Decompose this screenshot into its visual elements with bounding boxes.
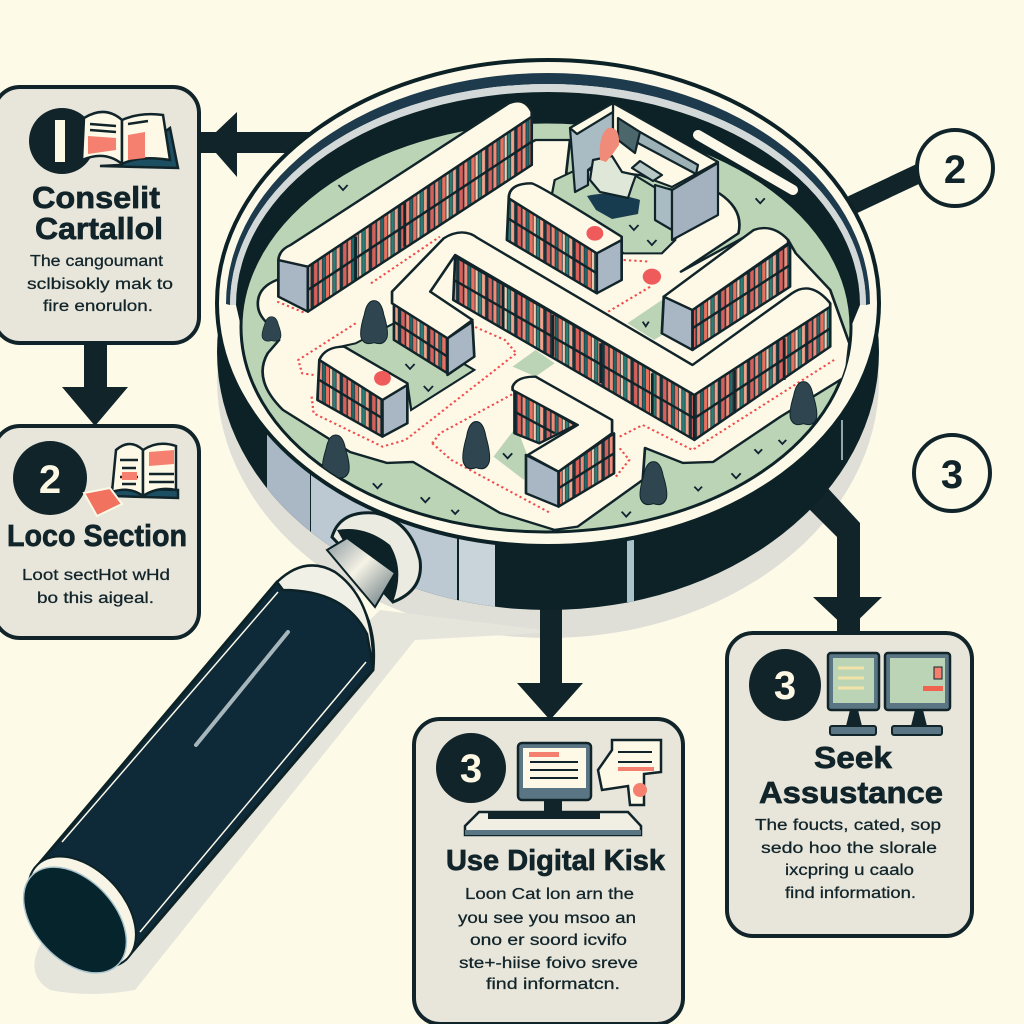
heading: Use Digital Kisk xyxy=(446,845,666,877)
panel: card 1 consult catalog xyxy=(0,87,199,343)
marker circle 2 xyxy=(917,130,993,206)
chair xyxy=(587,194,640,219)
outer rim xyxy=(217,60,879,546)
barrel panels xyxy=(267,420,843,620)
marker circle 3: 3 xyxy=(941,453,963,497)
body text: The cangoumant xyxy=(30,253,164,270)
green patch: centre xyxy=(628,300,662,340)
shelf B: centre bookcase xyxy=(507,183,622,293)
shelf C: right bookcase xyxy=(662,228,790,350)
wall screen xyxy=(618,118,640,153)
icon: open book xyxy=(82,112,178,168)
panel: card 4 seek assistance xyxy=(727,633,972,936)
body text: ono er soord icvifo xyxy=(470,932,627,949)
heading: Conselit xyxy=(32,180,160,215)
frame left cap xyxy=(570,103,613,134)
body text xyxy=(22,567,170,607)
keyboard xyxy=(632,161,662,181)
marker circle 3 xyxy=(914,435,990,511)
icon: open book xyxy=(112,444,178,498)
green patch: left xyxy=(340,323,474,410)
icon: red card xyxy=(84,488,122,516)
shelf A: long back-left bookcase xyxy=(278,101,532,312)
icon: monitor left xyxy=(828,653,879,735)
magnifier shadow xyxy=(34,122,879,994)
inner dark crescent xyxy=(236,92,860,327)
person body xyxy=(590,156,636,198)
connector arrow: lens to card 1 xyxy=(198,112,320,177)
desk and top frame xyxy=(590,103,718,187)
body text: The foucts, cated, sop xyxy=(755,817,941,834)
upper grey rim band xyxy=(230,84,866,305)
icon: speech bubble xyxy=(598,740,661,805)
number badge 3 xyxy=(749,649,821,721)
floor layer xyxy=(258,140,849,530)
green patch: lower xyxy=(493,427,528,480)
body text xyxy=(27,253,173,315)
marker F xyxy=(374,371,391,386)
icon: monitor right xyxy=(885,653,950,735)
marker B xyxy=(586,226,603,241)
number badge 3 xyxy=(436,733,506,803)
under-desk unit xyxy=(655,185,672,230)
shelf G: lower middle bookcase xyxy=(513,377,614,507)
lens green floor xyxy=(241,122,851,532)
handle grip xyxy=(38,572,374,959)
shelf D: large L-shaped bookcase xyxy=(392,232,830,440)
connector line: lens to marker 2 xyxy=(852,172,922,205)
body text: you see you msoo an xyxy=(458,910,636,927)
shelves layer xyxy=(278,101,830,507)
magnifier handle xyxy=(3,513,420,993)
arrowhead: card 4 xyxy=(813,597,882,630)
left wall xyxy=(570,103,613,192)
body text: sedo hoo the slorale xyxy=(761,840,937,857)
body text: bo this aigeal. xyxy=(37,590,154,607)
person head xyxy=(600,128,619,162)
handle end ring xyxy=(7,836,157,988)
upper blue rim band xyxy=(226,73,870,305)
body text: find information. xyxy=(785,885,916,902)
handle highlight xyxy=(196,632,288,745)
walkway xyxy=(258,140,849,530)
body text: ixcpring u caalo xyxy=(785,862,914,879)
body text xyxy=(755,817,941,902)
panel: card 3 use digital kiosk xyxy=(414,719,683,1024)
connector arrow: lens to card 4 xyxy=(800,485,860,634)
help desk kiosk xyxy=(570,103,718,240)
body text: Loon Cat lon arn the xyxy=(465,886,634,903)
handle shoulder band xyxy=(277,565,373,668)
body text xyxy=(458,886,638,993)
body text: ste+-hiise foivo sreve xyxy=(459,955,638,972)
number badge 2 xyxy=(13,441,87,515)
magnifier body xyxy=(217,60,879,620)
body text: fire enorulon. xyxy=(43,298,153,315)
marker circle 2: 2 xyxy=(944,148,966,192)
number badge 1 xyxy=(29,108,95,174)
metal neck xyxy=(327,538,395,607)
number badge 2: 2 xyxy=(39,458,61,502)
icon: computer kiosk xyxy=(465,743,641,835)
body text: Loot sectHot wHd xyxy=(22,567,170,584)
panel: card 4 seek assistance: Assustance xyxy=(759,775,943,810)
collar ring xyxy=(332,513,420,602)
grass tufts xyxy=(338,185,786,517)
connector arrow: lens to card 3 xyxy=(517,600,583,720)
number badge 3: 3 xyxy=(774,664,796,708)
shelf F: small left bookcase xyxy=(317,347,407,437)
library floor map xyxy=(258,101,849,530)
heading: Seek xyxy=(814,740,893,775)
marker: location pin xyxy=(642,268,662,285)
number badge 3: 3 xyxy=(460,747,482,791)
side box xyxy=(672,163,718,240)
dotted route xyxy=(277,237,834,513)
trees xyxy=(262,301,817,505)
dark lens barrel xyxy=(217,94,879,610)
arrow: card 1 to card 2 xyxy=(62,343,128,426)
lens highlight xyxy=(698,135,793,190)
wall rail xyxy=(636,132,698,174)
grip edge light xyxy=(62,592,366,932)
green patch: desk xyxy=(551,170,676,254)
body text: sclbisokly mak to xyxy=(27,276,173,293)
panel: card 1 consult catalog: Cartallol xyxy=(35,211,163,246)
dark collar recess xyxy=(337,529,398,602)
panel: card 2 locate section xyxy=(0,426,199,638)
body text: find informatcn. xyxy=(486,976,620,993)
heading: Loco Section xyxy=(7,518,187,553)
handle end cap xyxy=(3,847,147,993)
